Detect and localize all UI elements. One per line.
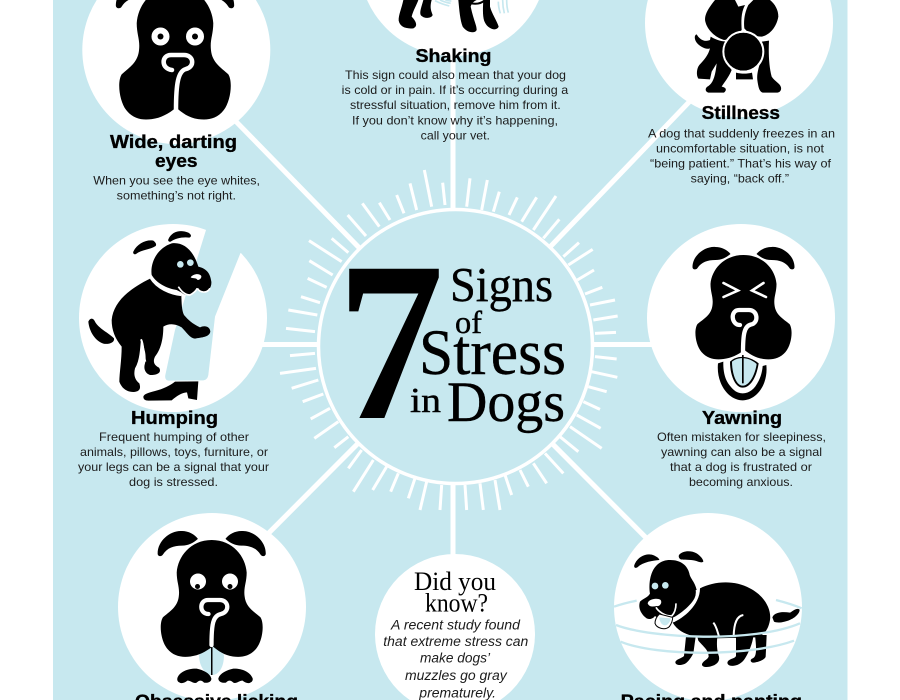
tail: [772, 609, 800, 623]
icon: dog seen from behind: [695, 0, 781, 93]
panel: obsessive licking: [118, 513, 306, 700]
icon: yawning dog: [692, 247, 794, 400]
description: Frequent humping of other: [99, 430, 249, 444]
icon: wide-eyed dog: [116, 0, 234, 120]
heading: Did you: [414, 567, 496, 596]
dog: [88, 231, 211, 392]
heading: Yawning: [702, 407, 782, 428]
description: animals, pillows, toys, furniture, or: [80, 445, 268, 459]
description: A dog that suddenly freezes in an: [648, 126, 835, 140]
icon: licking dog: [158, 531, 266, 683]
description: If you don’t know why it’s happening,: [352, 113, 558, 127]
description: When you see the eye whites,: [93, 173, 260, 187]
heading: Humping: [131, 407, 218, 428]
description: dog is stressed.: [129, 475, 218, 489]
panel: humping: [78, 217, 269, 489]
panel: pacing and panting: [614, 513, 802, 700]
fact text: [383, 617, 528, 700]
fact text: prematurely.: [418, 685, 496, 700]
description: saying, “back off.”: [691, 171, 789, 185]
fact text: A recent study found: [390, 617, 521, 632]
head: [639, 560, 697, 619]
heading: Wide, darting: [110, 131, 237, 152]
sunburst ticks around the title: [280, 170, 618, 510]
fact text: make dogs’: [420, 651, 491, 666]
description: is cold or in pain. If it’s occurring during a: [342, 83, 569, 97]
icon: pacing dog: [614, 551, 802, 667]
mouth: [718, 353, 767, 400]
heading: Stillness: [702, 102, 780, 123]
description: Often mistaken for sleepiness,: [657, 430, 826, 444]
title words: Stress: [419, 317, 566, 389]
neck and leg lines: [674, 590, 743, 637]
circle: [82, 0, 270, 144]
nose and muzzle: [648, 599, 661, 607]
legs: [675, 637, 696, 665]
human leg: [165, 217, 260, 381]
description: This sign could also mean that your dog: [345, 68, 566, 82]
title words: Signs: [450, 257, 553, 312]
shoe: [143, 381, 198, 401]
eyes: [652, 583, 658, 589]
description: [657, 430, 826, 489]
spokes connecting the signs to the centre: [170, 40, 740, 600]
circle: [375, 554, 535, 700]
circle: [79, 224, 267, 412]
ears: [634, 554, 659, 568]
tongue: [199, 640, 224, 675]
description: that a dog is frustrated or: [670, 460, 812, 474]
circle: [118, 513, 306, 700]
panel: did you know: [375, 554, 535, 700]
description: [342, 68, 569, 142]
title words: Dogs: [447, 371, 565, 434]
circle: [359, 0, 547, 56]
motion rings: [614, 600, 802, 653]
description: becoming anxious.: [689, 475, 793, 489]
icon: dog humping a leg: [88, 217, 260, 401]
fact text: muzzles go gray: [405, 668, 508, 683]
fact text: that extreme stress can: [383, 634, 528, 649]
circle: [614, 513, 802, 700]
circle: [647, 224, 835, 412]
title words: of: [455, 304, 482, 340]
heading: know?: [425, 589, 488, 618]
description: [78, 430, 269, 489]
description: something’s not right.: [117, 188, 236, 202]
title words: [410, 257, 566, 434]
description: “being patient.” That’s his way of: [650, 156, 832, 170]
description: call your vet.: [421, 128, 490, 142]
paws: [177, 669, 253, 683]
heading: eyes: [155, 150, 198, 171]
panel: shaking: [342, 0, 569, 142]
description: [93, 173, 260, 202]
title words: in: [410, 381, 441, 420]
tongue: [655, 614, 673, 629]
title numeral 7: 7: [337, 216, 444, 468]
description: your legs can be a signal that your: [78, 460, 269, 474]
icon: shaking dog legs: [399, 0, 508, 32]
heading: [110, 131, 237, 171]
body: [673, 582, 770, 638]
panel: stillness: [645, 0, 835, 185]
circle: [645, 0, 833, 117]
description: stressful situation, remove him from it.: [350, 98, 561, 112]
panel: wide, darting eyes: [82, 0, 270, 202]
heading: [414, 567, 496, 618]
description: yawning can also be a signal: [661, 445, 822, 459]
description: uncomfortable situation, is not: [656, 141, 825, 155]
description: [648, 126, 835, 185]
panel: yawning: [647, 224, 835, 489]
heading: Shaking: [416, 45, 492, 66]
title badge: [318, 210, 592, 484]
